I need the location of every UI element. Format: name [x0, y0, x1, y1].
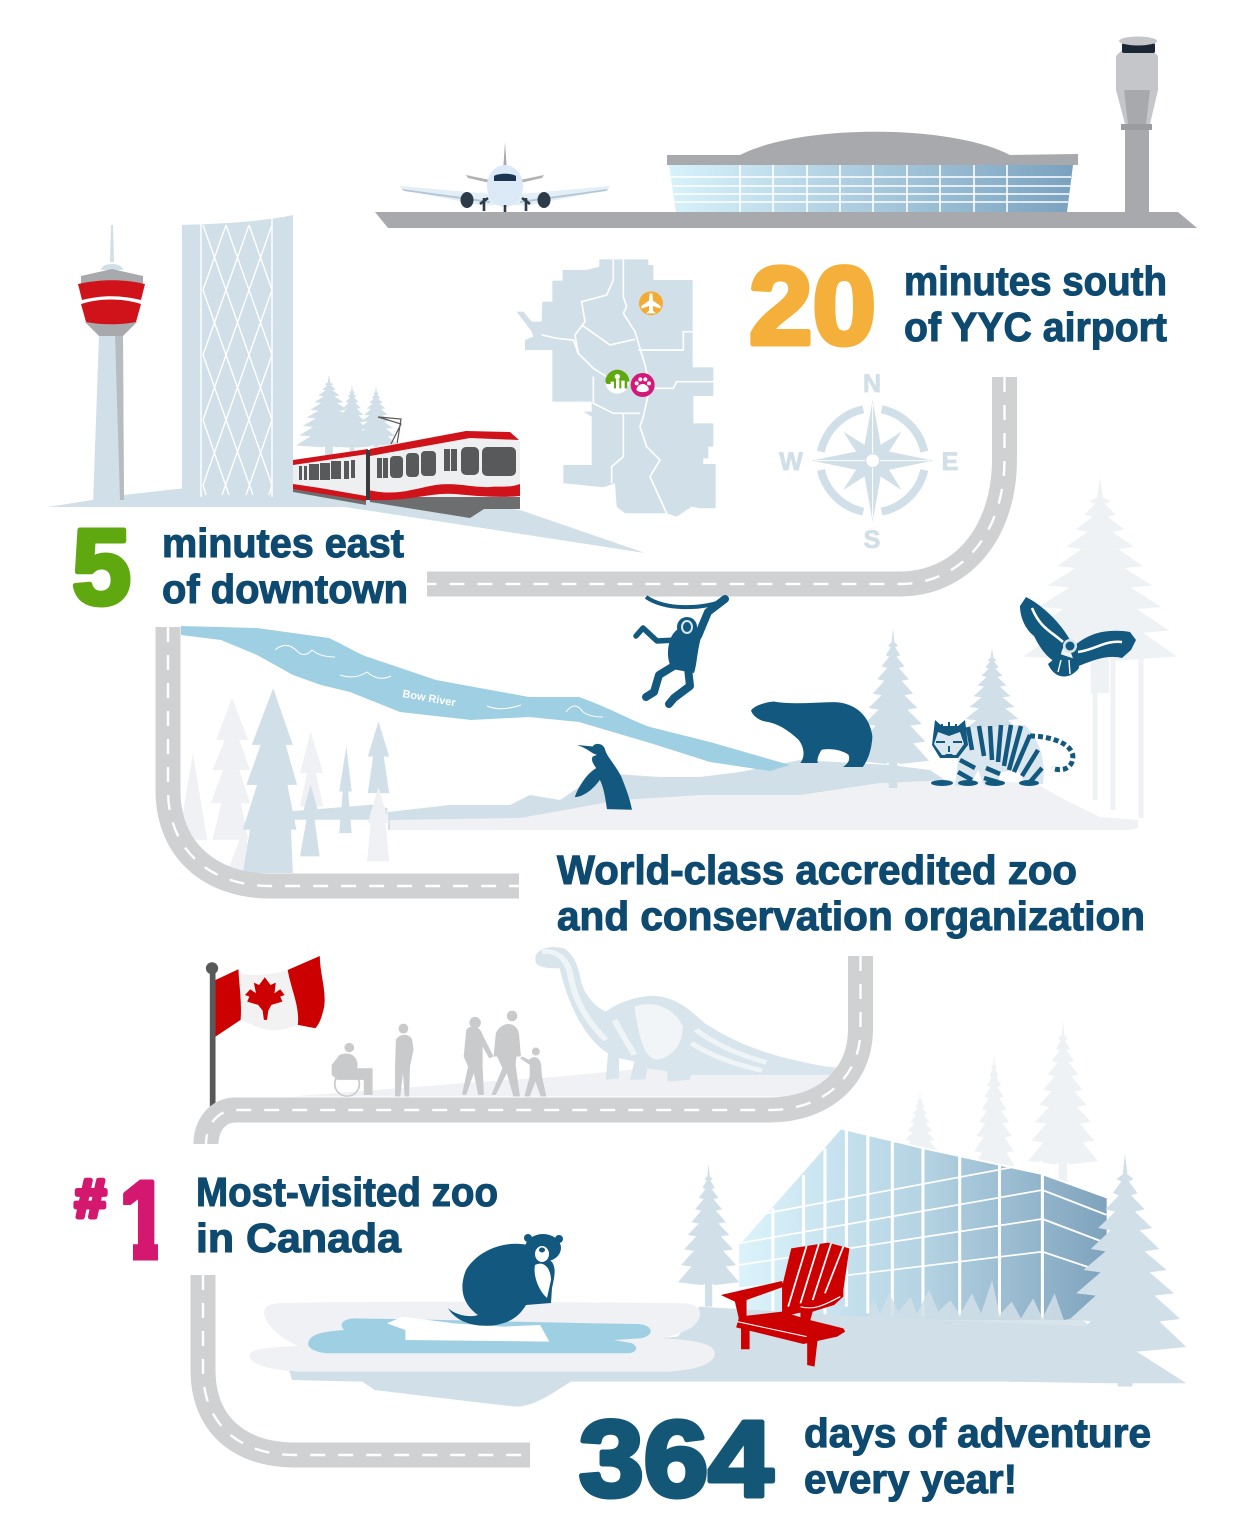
- left conifers: [179, 688, 389, 873]
- owl: [1020, 597, 1136, 677]
- walking woman: [462, 1017, 494, 1095]
- snowy hills: [388, 760, 1138, 830]
- right big tree: [1064, 1153, 1186, 1387]
- label: days of adventure: [804, 1410, 1151, 1456]
- zoo pin: [631, 373, 655, 397]
- tall pale trees: [1023, 478, 1177, 818]
- gibbon: [636, 597, 726, 704]
- CTrain: [293, 417, 520, 518]
- background trees: [898, 1020, 1098, 1192]
- airport scene: [375, 36, 1197, 228]
- runway apron: [375, 212, 1197, 228]
- number 364: 364: [579, 1398, 773, 1519]
- Bow River: Bow River: [401, 688, 457, 709]
- heading: world-class accredited zoo: [557, 847, 1145, 939]
- road segment 4: [203, 1275, 530, 1455]
- number 5: 5: [72, 506, 131, 627]
- Bow building: [182, 215, 293, 497]
- zoo scene: [179, 478, 1177, 873]
- tiger: [931, 720, 1073, 786]
- road segment 3: [206, 956, 860, 1144]
- number 1: #: [75, 1169, 106, 1229]
- label: minutes south: [904, 258, 1167, 304]
- Bow River: [181, 626, 790, 771]
- number 20: 20: [749, 245, 876, 368]
- frozen ground: [289, 1307, 1186, 1407]
- ice floe: [387, 1317, 549, 1342]
- stat: 364 days of adventure: [579, 1398, 1151, 1519]
- distance text: 20 minutes south of YYC airport: [749, 245, 1167, 368]
- airport pin: [639, 291, 663, 315]
- penguin: [575, 744, 632, 810]
- stat: #1 most-visited zoo: 1: [119, 1159, 169, 1282]
- control tower: [1116, 36, 1158, 213]
- ground wedge: [48, 488, 645, 553]
- polar bear: [751, 701, 872, 767]
- child: [520, 1048, 546, 1097]
- conservatory: [739, 1128, 1107, 1320]
- wheelchair visitor: [332, 1043, 373, 1096]
- label: minutes east: [162, 520, 404, 566]
- red Muskoka chair: [721, 1243, 849, 1367]
- heading: world-class accredited zoo: World-class accredited zoo: [557, 847, 1077, 893]
- distance text: 5 minutes east of downtown: of downtown: [162, 566, 408, 612]
- front car: [370, 431, 520, 500]
- Calgary Tower: [78, 225, 145, 505]
- airplane: [400, 142, 610, 212]
- standing visitor: [395, 1024, 414, 1097]
- stat: 364 days of adventure: every year!: [804, 1456, 1017, 1502]
- compass rose: S: [864, 526, 880, 554]
- distance text: 5 minutes east of downtown: [72, 506, 408, 627]
- heading: world-class accredited zoo: and conservation organization: [557, 893, 1145, 939]
- background trees: [296, 375, 397, 460]
- terminal building: [667, 132, 1078, 212]
- walking man: [491, 1011, 521, 1097]
- beaver: [448, 1234, 563, 1326]
- downtown pin: [605, 370, 629, 394]
- left tree: [678, 1163, 739, 1307]
- label line 2: of YYC airport: [904, 304, 1167, 350]
- ice sheet: [249, 1302, 715, 1372]
- city map: [517, 259, 716, 517]
- grass: [865, 1280, 1098, 1333]
- road segment 1: [427, 377, 1004, 584]
- label: Most-visited zoo: [196, 1169, 498, 1215]
- compass rose: E: [942, 448, 958, 476]
- stat: #1 most-visited zoo: [73, 1176, 498, 1260]
- road segment 2: [168, 627, 519, 886]
- compass rose: N: [863, 370, 881, 398]
- visitors and dinosaur scene: [291, 947, 837, 1097]
- downtown skyline scene: [48, 215, 645, 553]
- ground: [291, 1067, 837, 1097]
- water: [308, 1318, 651, 1353]
- compass rose: [779, 370, 958, 554]
- dinosaur: [535, 947, 837, 1082]
- ENMAX conservatory scene: [249, 1020, 1186, 1407]
- Canadian flag: [206, 956, 325, 1108]
- compass rose: W: [779, 448, 803, 476]
- rear car: [293, 450, 368, 500]
- pantograph: [378, 417, 401, 444]
- stat: #1 most-visited zoo: in Canada: [196, 1215, 402, 1261]
- spruce trees: [857, 628, 1025, 788]
